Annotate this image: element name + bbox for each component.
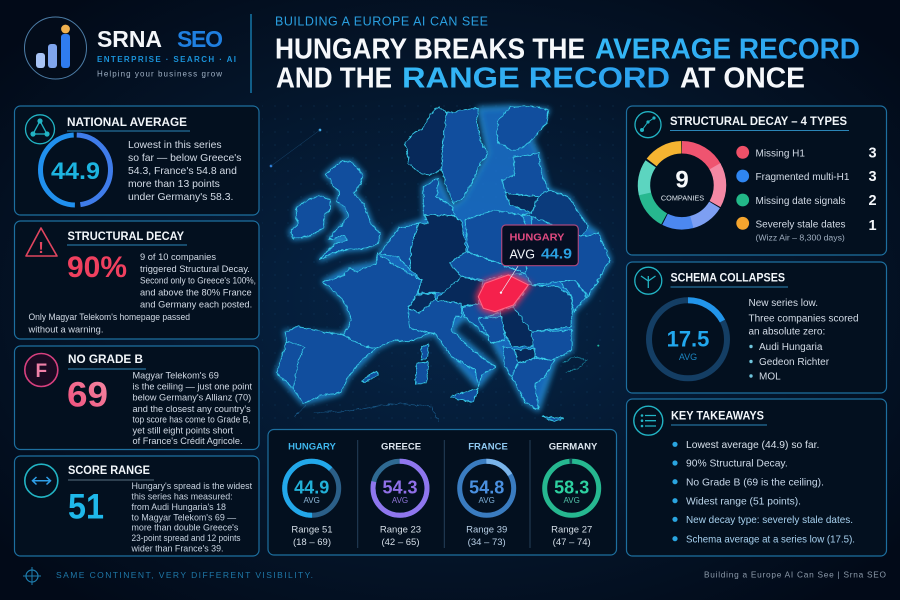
panel: key takeaways: Lowest average (44.9) so far. <box>686 440 819 451</box>
callout: Hungary: 44.9 <box>541 245 572 262</box>
panel: no grade B: NO GRADE B <box>68 354 143 366</box>
panel: national average: 54.3, France's 54.8 and <box>128 166 237 177</box>
panel: decay types <box>626 106 886 255</box>
panel: score range: this series has measured: <box>132 491 233 501</box>
Germany score: Range 27 <box>551 524 592 535</box>
donut chart: COMPANIES <box>661 193 704 202</box>
legend <box>736 145 877 243</box>
panel: key takeaways: 90% Structural Decay. <box>686 459 788 470</box>
Germany score: 58.3 <box>554 477 589 497</box>
panel: national average: so far — below Greece's <box>128 153 241 164</box>
panel: structural decay <box>14 221 259 339</box>
panel: schema collapses: MOL <box>759 371 781 382</box>
panel: no grade B: yet still eight points short <box>132 425 234 435</box>
Germany score: GERMANY <box>549 441 598 452</box>
panel: key takeaways: New decay type: severely stale dates. <box>686 515 853 526</box>
panel: score range: wider than France's 39. <box>130 544 223 554</box>
map of Europe <box>270 106 610 422</box>
panel: score range: SCORE RANGE <box>68 465 150 477</box>
title <box>275 14 860 94</box>
panel: schema collapses <box>626 262 886 393</box>
panel: score range: 51 <box>68 487 104 526</box>
panel: schema collapses: AVG <box>679 352 697 362</box>
France score: FRANCE <box>468 441 508 452</box>
panel: no grade B: 69 <box>67 376 108 415</box>
donut chart: 9 <box>675 166 689 193</box>
panel: structural decay: 90% <box>67 251 127 284</box>
panel: score range: 23-point spread and 12 points <box>132 533 241 543</box>
logo: SRNA <box>97 26 162 52</box>
Germany score: (47 – 74) <box>553 537 591 548</box>
Germany score: AVG <box>564 496 580 505</box>
footer: Building a Europe AI Can See | Srna SEO <box>704 570 887 580</box>
legend: 2 <box>868 193 877 209</box>
panel: key takeaways: Schema average at a series low (17.5). <box>686 534 855 545</box>
legend: 3 <box>868 169 877 185</box>
panel: structural decay: without a warning. <box>28 325 103 335</box>
panel: structural decay: triggered Structural Decay. <box>140 264 250 274</box>
panel: structural decay: STRUCTURAL DECAY <box>68 231 184 243</box>
Greece score <box>373 441 427 548</box>
title: BUILDING A EUROPE AI CAN SEE <box>275 14 488 28</box>
panel: schema collapses: Three companies scored <box>748 314 859 325</box>
title: AVERAGE RECORD <box>595 33 860 65</box>
panel: score range: more than double Greece's <box>132 523 239 533</box>
France score: (34 – 73) <box>468 537 506 548</box>
panel: schema collapses: Audi Hungaria <box>759 342 823 353</box>
legend: 3 <box>868 145 877 161</box>
panel: national average <box>14 106 259 215</box>
panel: national average: under Germany's 58.3. <box>128 192 233 203</box>
panel: national average: 44.9 <box>51 158 100 185</box>
legend: Missing H1 <box>756 148 805 160</box>
legend: Missing date signals <box>756 196 846 207</box>
Hungary score <box>285 441 339 548</box>
France score: AVG <box>479 496 495 505</box>
logo: ENTERPRISE · SEARCH · AI <box>97 55 236 64</box>
panel: score range: from Audi Hungaria's 18 <box>132 502 226 512</box>
legend: Fragmented multi-H1 <box>756 172 850 183</box>
Greece score: GREECE <box>381 441 421 452</box>
panel: score range <box>14 456 259 556</box>
legend: Severely stale dates <box>756 220 846 230</box>
callout: Hungary <box>502 225 578 266</box>
panel: national average: Lowest in this series <box>128 140 222 151</box>
donut chart <box>629 132 735 239</box>
panel: no grade B: Magyar Telekom's 69 <box>132 370 219 380</box>
panel: schema collapses: 17.5 <box>667 327 709 352</box>
logo <box>24 17 236 79</box>
panel: structural decay: and above the 80% France <box>140 288 252 298</box>
panel: key takeaways <box>626 399 886 556</box>
legend: (Wizz Air – 8,300 days) <box>756 233 845 243</box>
Greece score: (42 – 65) <box>381 537 420 548</box>
footer <box>16 564 887 585</box>
title: HUNGARY BREAKS THE <box>275 33 585 65</box>
logo: Helping your business grow <box>97 70 222 78</box>
panel: structural decay: Second only to Greece's 100%, <box>140 276 256 286</box>
title: AT ONCE <box>680 62 805 94</box>
panel: no grade B: and the closest any country's <box>132 404 251 414</box>
Hungary score: 44.9 <box>294 477 329 497</box>
Greece score: Range 23 <box>380 524 421 535</box>
panel: score range: to Magyar Telekom's 69 — <box>132 512 236 522</box>
Hungary score: HUNGARY <box>288 441 336 452</box>
callout: Hungary: HUNGARY <box>510 232 564 244</box>
France score: 54.8 <box>469 477 504 497</box>
panel: structural decay: ! <box>38 240 44 257</box>
Hungary score: Range 51 <box>291 524 333 535</box>
panel: decay types: STRUCTURAL DECAY – 4 TYPES <box>670 116 847 128</box>
panel: key takeaways: KEY TAKEAWAYS <box>671 411 764 423</box>
legend: 1 <box>868 218 877 234</box>
France score <box>460 441 514 548</box>
callout: Hungary: AVG <box>510 247 535 261</box>
panel: schema collapses: Gedeon Richter <box>759 357 830 368</box>
Hungary score: (18 – 69) <box>293 537 331 548</box>
Germany score <box>543 441 601 548</box>
panel: country comparison <box>268 430 616 555</box>
panel: score range: Hungary's spread is the widest <box>132 481 253 491</box>
panel: no grade B <box>14 346 259 450</box>
panel: structural decay: Only Magyar Telekom's homepage passed <box>28 312 190 322</box>
France score: Range 39 <box>466 524 507 535</box>
land masses <box>277 106 610 422</box>
footer: SAME CONTINENT, VERY DIFFERENT VISIBILITY. <box>56 570 313 580</box>
title: AND THE <box>276 62 392 94</box>
panel: key takeaways: No Grade B (69 is the ceiling). <box>686 477 824 488</box>
panel: no grade B: top score has come to Grade B, <box>132 415 250 425</box>
panel: no grade B: F <box>35 361 47 382</box>
panel: key takeaways: Widest range (51 points). <box>686 496 801 507</box>
panel: no grade B: of France's Crédit Agricole. <box>132 436 243 446</box>
panel: no grade B: below Germany's Allianz (70) <box>132 393 251 403</box>
panel: national average: more than 13 points <box>128 179 220 190</box>
title: RANGE RECORD <box>402 62 670 94</box>
panel: structural decay: 9 of 10 companies <box>140 252 216 262</box>
Greece score: AVG <box>392 496 408 505</box>
panel: national average: NATIONAL AVERAGE <box>67 117 187 129</box>
Greece score: 54.3 <box>382 477 418 497</box>
panel: structural decay: and Germany each posted. <box>140 299 252 309</box>
logo: SEO <box>177 26 223 52</box>
panel: no grade B: is the ceiling — just one point <box>132 382 252 392</box>
panel: schema collapses: New series low. <box>748 298 818 309</box>
Hungary score: AVG <box>304 496 320 505</box>
panel: schema collapses: an absolute zero: <box>748 326 825 337</box>
panel: schema collapses: SCHEMA COLLAPSES <box>670 273 785 285</box>
